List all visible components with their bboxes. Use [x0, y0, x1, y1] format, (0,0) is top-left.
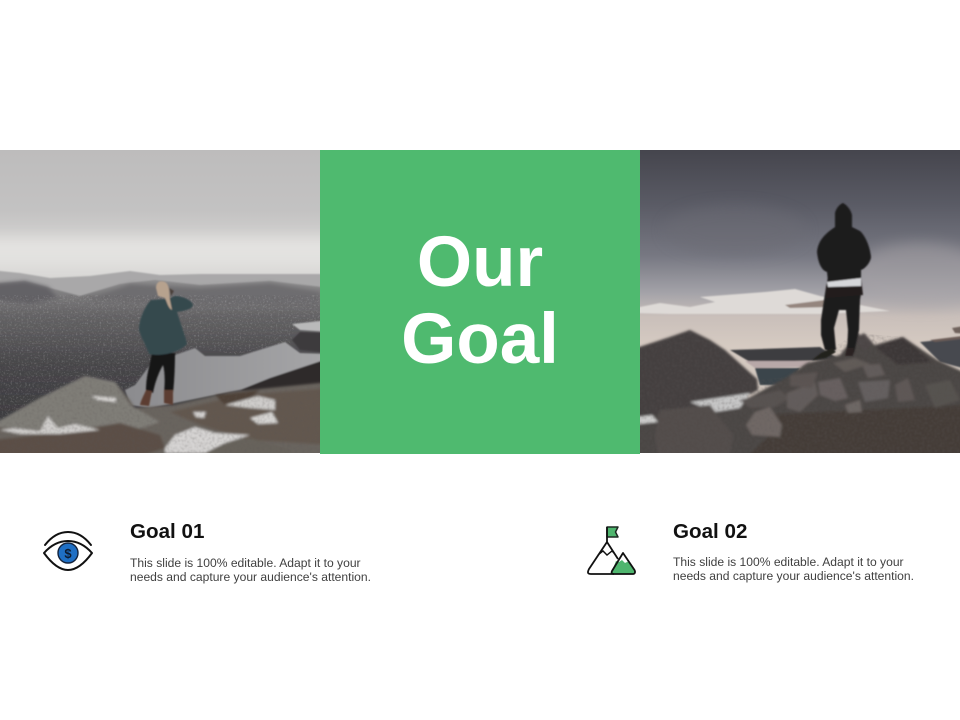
- goal 02 description: [673, 555, 914, 583]
- goal 02 heading: Goal 02: [673, 520, 747, 543]
- goal 01 description: [130, 556, 371, 584]
- photo: hiker silhouette on rocky summit at dusk: [640, 150, 960, 453]
- icon: eye with dollar coin: $: [64, 546, 72, 561]
- woman: [139, 281, 193, 406]
- lake: [125, 320, 330, 408]
- green title panel: [320, 150, 640, 454]
- title: Our: [417, 223, 543, 302]
- distant horizon: [730, 325, 960, 385]
- hiker: [812, 203, 871, 360]
- goal 01 description: This slide is 100% editable. Adapt it to your: [130, 556, 361, 570]
- goal 01 block: [43, 520, 371, 584]
- goal 01 description: needs and capture your audience's attention.: [130, 570, 371, 584]
- icon: eye with dollar coin: [43, 531, 93, 571]
- valley: [0, 280, 330, 453]
- goal 02 block: [587, 520, 914, 583]
- goal 01 heading: Goal 01: [130, 520, 204, 543]
- goal 02 description: needs and capture your audience's attention.: [673, 569, 914, 583]
- goal 02 description: This slide is 100% editable. Adapt it to your: [673, 555, 904, 569]
- icon: mountains with flag: [587, 526, 636, 575]
- cloud band: [635, 289, 890, 314]
- rocks: [630, 330, 960, 463]
- title: Goal: [401, 300, 559, 379]
- far hills: [0, 270, 330, 300]
- title: [401, 223, 559, 379]
- ground: [0, 376, 330, 463]
- photo: woman overlooking lake and valley: [0, 150, 320, 453]
